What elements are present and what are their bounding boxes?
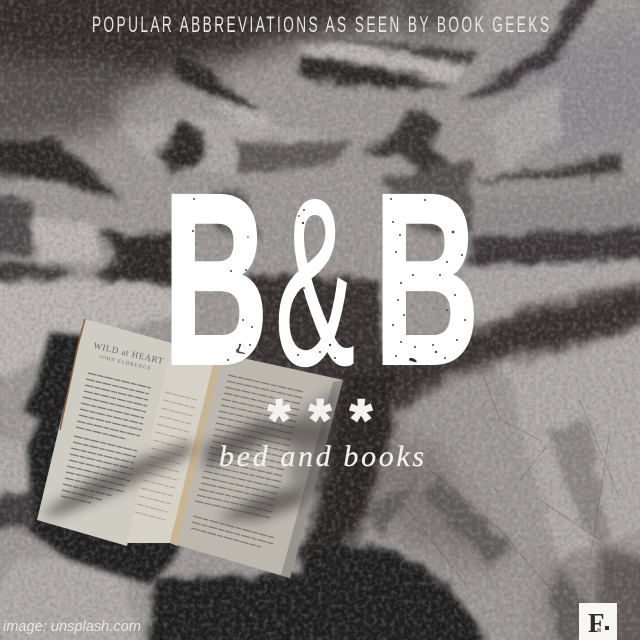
- middle page: [127, 343, 213, 543]
- right page: [170, 359, 343, 578]
- image credit: image: unsplash.com: [3, 619, 141, 635]
- big title letters B & B: B: [163, 145, 268, 415]
- left page: WILD at HEART: [93, 340, 165, 366]
- logo: F.: F: [588, 608, 604, 638]
- three asterisks divider: *: [309, 388, 332, 453]
- three asterisks divider: *: [350, 388, 373, 453]
- big title letters B & B: [163, 145, 479, 415]
- left page: JOHN ELDREDGE: [99, 355, 152, 372]
- three asterisks divider: [268, 388, 373, 453]
- shadow cast by the book: [23, 332, 180, 585]
- photo: open book: [37, 319, 343, 578]
- left page: [37, 319, 172, 546]
- logo: F.: [579, 603, 617, 640]
- three asterisks divider: *: [268, 388, 291, 453]
- big title letters B & B: B: [374, 145, 479, 415]
- fine creases: [400, 340, 620, 600]
- distressed specks on letters: [192, 198, 466, 363]
- dark wrinkles: [0, 0, 640, 380]
- big title letters B & B: &: [275, 149, 355, 414]
- window shadows on pages: [40, 385, 340, 520]
- heading: popular abbreviations: POPULAR ABBREVIATIONS AS SEEN BY BOOK GEEKS: [92, 12, 549, 37]
- subtitle: bed and books: bed and books: [219, 440, 424, 473]
